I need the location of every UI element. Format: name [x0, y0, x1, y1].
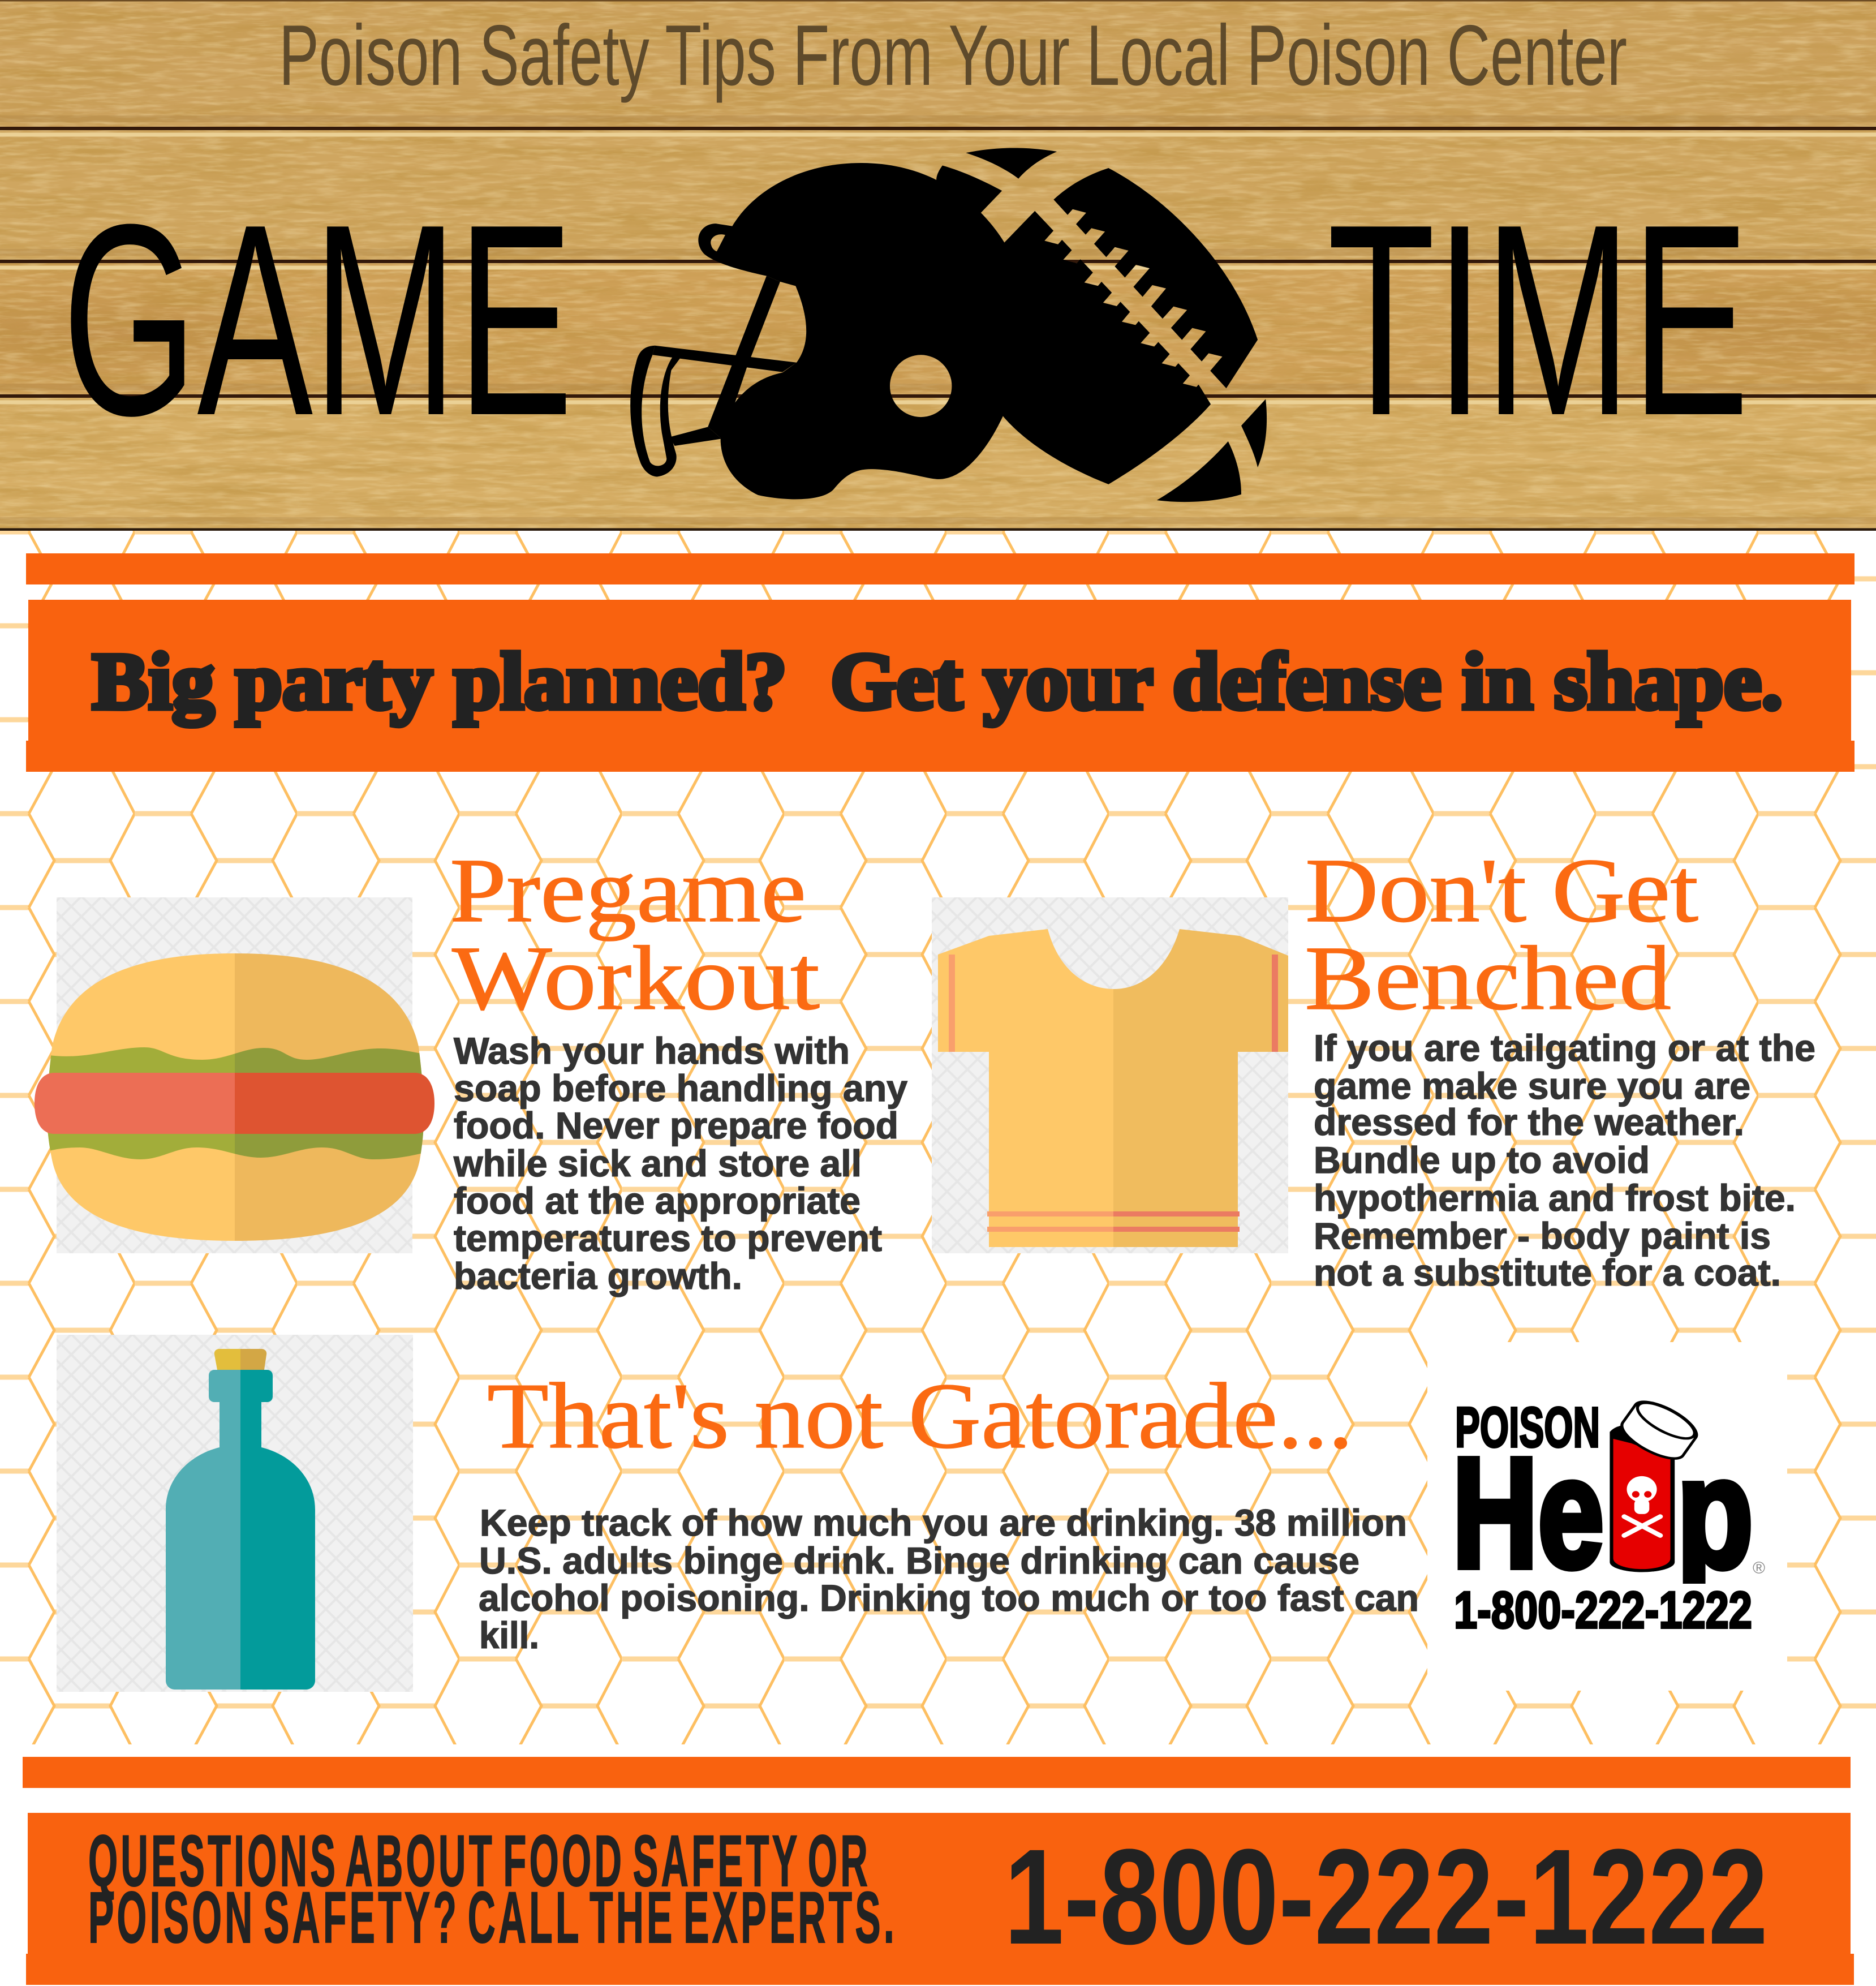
body text: binge drinking	[479, 1502, 1419, 1656]
panel: pregame workout	[35, 840, 907, 1297]
tile behind jersey	[932, 897, 1288, 1253]
banner: big party planned	[26, 600, 1855, 772]
icon: poison bottle with skull	[1610, 1393, 1705, 1572]
body text: don't get benched: If you are tailgating or at the	[1314, 1027, 1815, 1069]
heading: pregame workout: Pregame	[450, 840, 806, 942]
banner text part one: Big party planned?	[92, 637, 787, 727]
body text: binge drinking: U.S. adults binge drink. Binge drinking can cause	[479, 1540, 1359, 1581]
wood plank header background	[0, 0, 1876, 531]
heading: don't get benched	[1305, 840, 1698, 1029]
logo word: POISON: POISON	[1455, 1396, 1600, 1459]
body text: pregame workout: Wash your hands with	[454, 1030, 850, 1072]
body text: pregame workout	[453, 1030, 907, 1297]
footer call to action	[88, 1821, 897, 1958]
banner text part two: Get your defense in shape.	[831, 637, 1783, 726]
tile behind bottle	[57, 1335, 413, 1692]
body text: don't get benched: game make sure you are	[1314, 1065, 1750, 1107]
body text: pregame workout: bacteria growth.	[454, 1255, 742, 1297]
logo phone number: 1-800-222-1222	[1454, 1581, 1752, 1639]
body text: don't get benched: not a substitute for a coat.	[1314, 1252, 1781, 1293]
logo: poison help	[1427, 1342, 1787, 1691]
body text: binge drinking: alcohol poisoning. Drinking too much or too fast can	[479, 1577, 1419, 1619]
body text: binge drinking: Keep track of how much you are drinking. 38 million	[480, 1502, 1407, 1544]
skull and crossbones	[1624, 1476, 1660, 1536]
body text: don't get benched: dressed for the weather.	[1314, 1101, 1744, 1143]
body text: pregame workout: temperatures to prevent	[454, 1217, 882, 1259]
body text: don't get benched: Bundle up to avoid	[1314, 1139, 1650, 1181]
orange strip above footer	[23, 1757, 1851, 1788]
body text: don't get benched	[1314, 1027, 1815, 1293]
body text: pregame workout: food. Never prepare food	[454, 1104, 898, 1146]
heading: that's not gatorade: That's not Gatorade...	[487, 1364, 1353, 1468]
icon: jersey	[938, 929, 1288, 1247]
panel: that's not gatorade	[57, 1335, 1419, 1692]
icon: burger	[35, 953, 434, 1241]
body text: pregame workout: food at the appropriate	[454, 1180, 860, 1222]
panel: don't get benched	[932, 840, 1815, 1293]
icon: football helmet and football	[630, 148, 1267, 502]
body text: pregame workout: while sick and store all	[453, 1142, 862, 1184]
title word: GAME: GAME	[62, 168, 573, 472]
body text: don't get benched: Remember - body paint is	[1314, 1215, 1771, 1257]
logo letters: He: He	[1452, 1426, 1604, 1600]
footer call to action: QUESTIONS ABOUT FOOD SAFETY OR	[88, 1821, 871, 1902]
footer band	[26, 1813, 1854, 1985]
tile behind burger	[57, 897, 412, 1253]
body text: binge drinking: kill.	[479, 1614, 539, 1656]
logo letter: p: p	[1677, 1426, 1753, 1601]
logo registered mark: ®	[1753, 1559, 1765, 1577]
body text: don't get benched: hypothermia and frost bite.	[1314, 1177, 1796, 1219]
honeycomb background	[0, 531, 1876, 1986]
icon: bottle	[166, 1349, 315, 1690]
orange strip above banner	[26, 553, 1855, 584]
heading: pregame workout: Workout	[452, 928, 820, 1029]
heading: don't get benched: Benched	[1305, 928, 1671, 1029]
heading: pregame workout	[450, 840, 820, 1029]
body text: pregame workout: soap before handling any	[454, 1067, 907, 1109]
footer call to action: POISON SAFETY? CALL THE EXPERTS.	[88, 1877, 897, 1958]
heading: don't get benched: Don't Get	[1305, 840, 1698, 942]
